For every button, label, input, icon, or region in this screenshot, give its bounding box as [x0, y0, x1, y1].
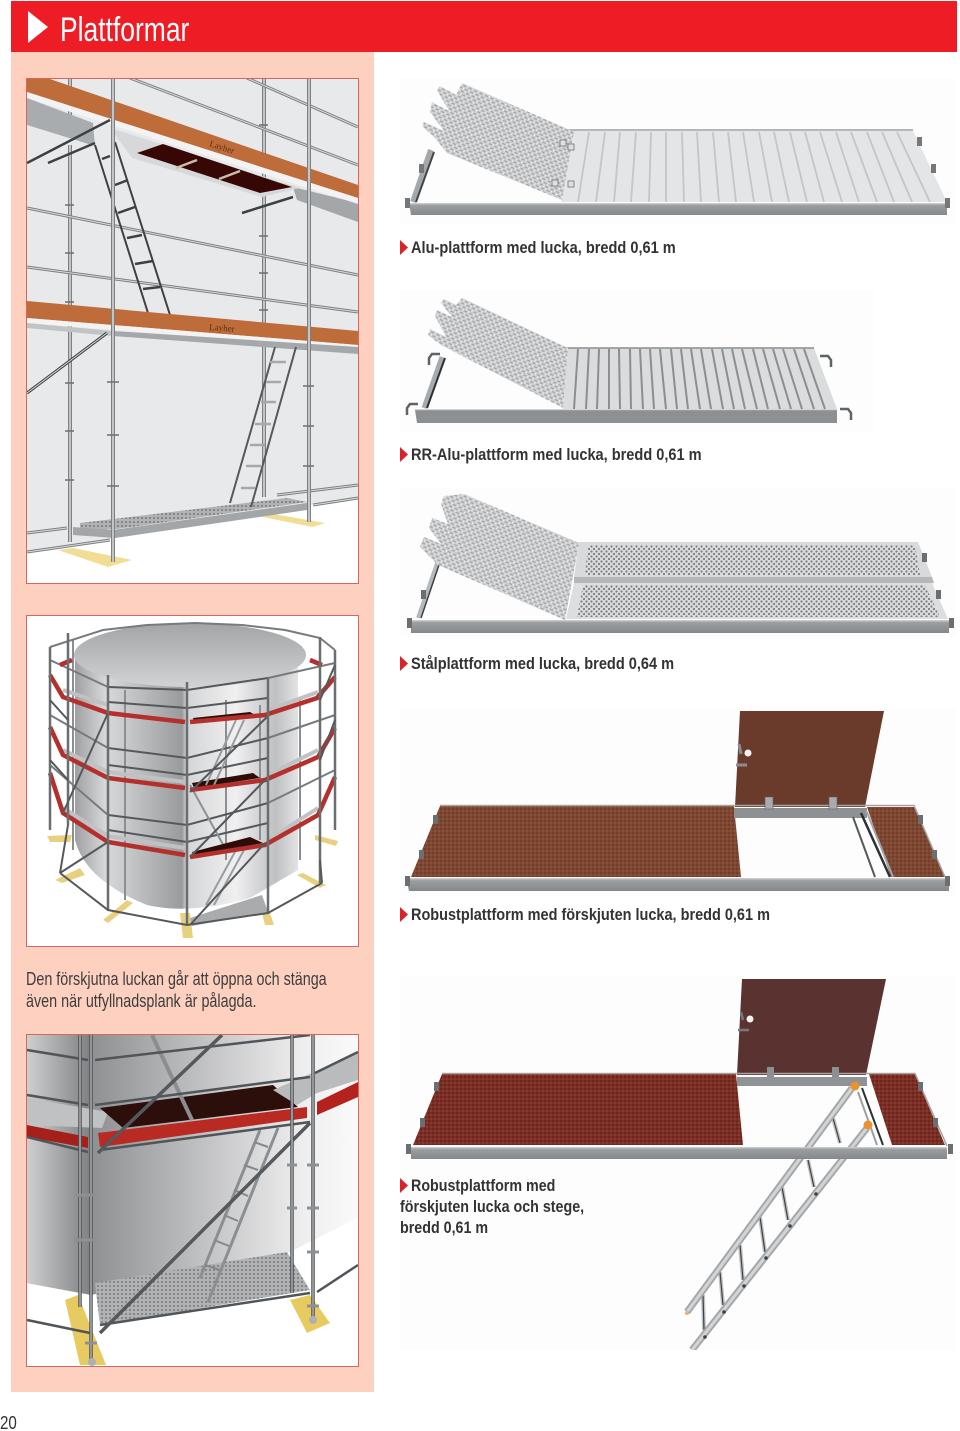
text block: sliding hatch note [26, 969, 327, 1011]
photo: facade scaffold with hatch platforms: Layher [208, 138, 236, 156]
photo: facade scaffold with hatch platforms [26, 78, 359, 584]
photo: close-up of hatch on round scaffold [26, 1034, 359, 1367]
text block: sliding hatch note: Den förskjutna luckan går att öppna och stänga [26, 969, 327, 989]
caption arrow and label: robust platform with ladder: bredd 0,61 m [400, 1218, 488, 1237]
banner arrow icon [28, 11, 48, 43]
title: Plattformar [60, 11, 189, 49]
product image: RR alu platform with hatch [406, 298, 852, 423]
side panel background [11, 52, 374, 1392]
product image: alu platform with hatch [405, 83, 950, 215]
caption arrow and label: steel platform: Stålplattform med lucka, bredd 0,64 m [411, 654, 674, 673]
product image: steel platform with hatch [407, 494, 954, 633]
caption arrow and label: robust platform with ladder [400, 1176, 584, 1237]
product image: robust platform with hatch and ladder [406, 979, 953, 1350]
text block: sliding hatch note: även när utfyllnadsplank är pålagda. [26, 990, 256, 1010]
photo: facade scaffold with hatch platforms: Layher [209, 322, 235, 334]
caption arrow and label: robust platform with ladder: Robustplattform med [411, 1176, 555, 1195]
title banner [11, 1, 957, 52]
caption arrow and label: RR alu platform: RR-Alu-plattform med lucka, bredd 0,61 m [411, 445, 702, 464]
caption arrow and label: robust platform with ladder: förskjuten lucka och stege, [400, 1197, 584, 1216]
caption arrow and label: robust platform: Robustplattform med förskjuten lucka, bredd 0,61 m [411, 905, 770, 924]
photo: round tank scaffold [26, 615, 359, 947]
product image: robust platform with sliding hatch [405, 711, 950, 891]
caption arrow and label: alu platform: Alu-plattform med lucka, bredd 0,61 m [411, 238, 676, 257]
